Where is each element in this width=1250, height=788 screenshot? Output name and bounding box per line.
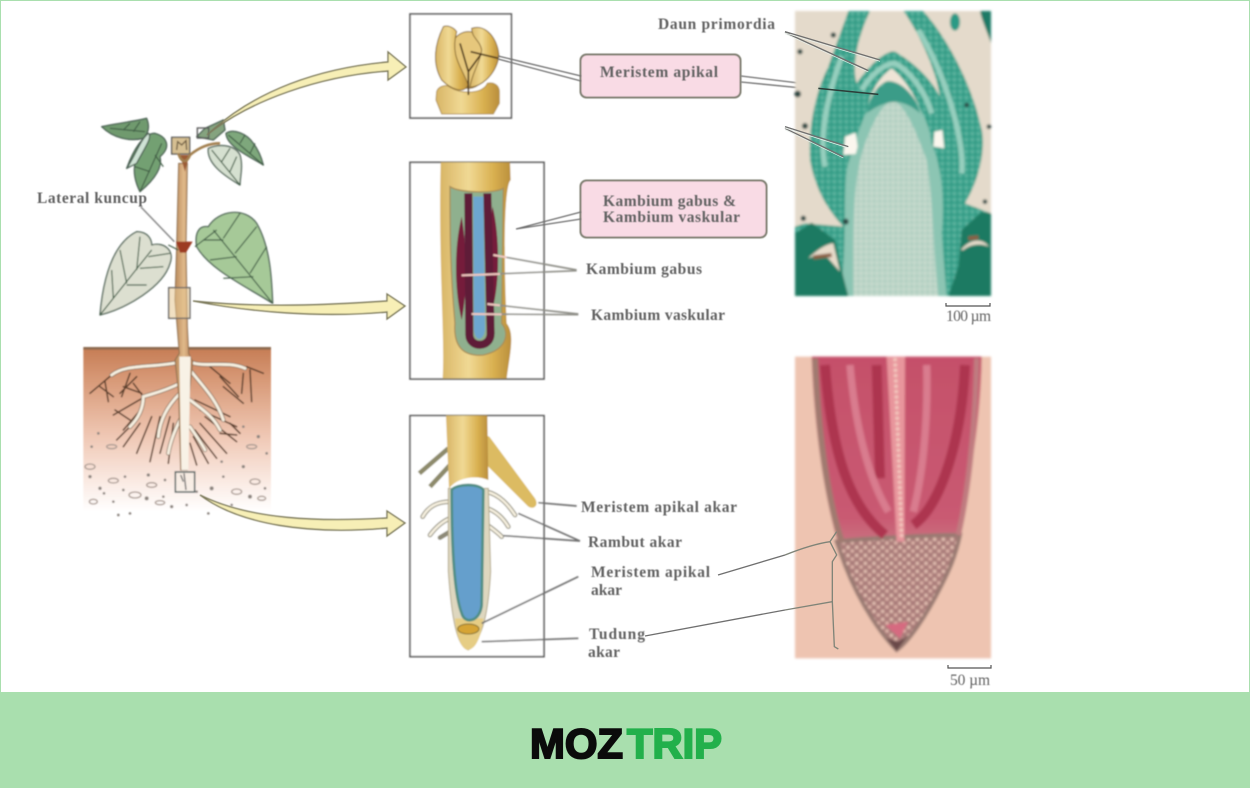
blue core bbox=[473, 197, 485, 339]
panel: apical bud bbox=[410, 14, 511, 118]
pointer lines bbox=[482, 503, 580, 642]
label: Meristem apikal akar two lines: akar bbox=[591, 582, 622, 599]
label: Meristem apikal akar two lines: Meristem apikal bbox=[591, 564, 711, 581]
pointer line to lateral bud bbox=[141, 207, 174, 242]
footer logo: MOZ bbox=[530, 720, 623, 767]
arrow: top bud bbox=[207, 52, 406, 135]
panel: root section bbox=[410, 416, 580, 657]
arrow: root tip bbox=[200, 495, 405, 536]
stem sample box bbox=[169, 288, 190, 318]
callout: Meristem apikal bbox=[580, 54, 740, 98]
pale central stele bbox=[887, 357, 905, 542]
main lateral roots bbox=[112, 362, 245, 453]
outer root shape bbox=[812, 357, 982, 650]
cell zone bbox=[837, 535, 960, 650]
label: Tudung akar bbox=[588, 626, 645, 661]
label: Meristem apikal akar two lines bbox=[591, 564, 711, 599]
upper root hairs bbox=[419, 448, 450, 487]
callout: Kambium gabus and vaskular: Kambium gabus & bbox=[603, 193, 736, 210]
root tip sample box bbox=[175, 472, 195, 492]
soil block bbox=[83, 347, 271, 516]
tip dark bbox=[887, 635, 908, 651]
pale root sheath bbox=[448, 488, 491, 650]
pale left rim bbox=[815, 358, 842, 542]
gap above apex bbox=[868, 68, 920, 108]
pale pointers bbox=[462, 255, 578, 315]
panel: stem cross-section bbox=[410, 162, 578, 379]
label: Tudung akar: akar bbox=[588, 644, 620, 661]
dark specks bbox=[794, 32, 991, 225]
apex dome bbox=[867, 82, 920, 113]
darker streaks bbox=[825, 365, 965, 535]
bud collar bbox=[436, 83, 499, 114]
inner tissue bbox=[840, 83, 947, 296]
bud gaps bbox=[843, 130, 944, 155]
stem body bbox=[440, 162, 511, 378]
label: Tudung akar: Tudung bbox=[589, 626, 645, 643]
lateral root bbox=[485, 435, 537, 508]
callout: Meristem apikal: Meristem apikal bbox=[600, 64, 719, 81]
stem and taproot bbox=[175, 155, 193, 470]
cork cambium lenses bbox=[456, 207, 498, 320]
footer logo bbox=[530, 720, 722, 767]
pointer lines bbox=[785, 32, 880, 157]
label: Daun primordia: Daun primordia bbox=[658, 16, 775, 33]
micrograph: shoot tip, teal bbox=[785, 11, 991, 296]
lower root hairs bbox=[423, 492, 515, 538]
bud dome and leaves bbox=[435, 26, 499, 90]
label: Rambut akar: Rambut akar bbox=[588, 534, 682, 551]
pointer lines to right micrographs from root labels bbox=[645, 555, 785, 636]
pith bbox=[853, 100, 938, 296]
bracket and pointer lines bbox=[785, 532, 838, 649]
leaves bbox=[100, 118, 273, 315]
label: Meristem apikal akar: Meristem apikal akar bbox=[581, 499, 737, 516]
lower corners bbox=[795, 212, 991, 296]
scale bar: 50 µm: 50 µm bbox=[950, 672, 990, 689]
micrograph: root tip, pink bbox=[785, 357, 991, 658]
footer logo: TRIP bbox=[627, 720, 722, 767]
paler leaf band bbox=[823, 30, 962, 173]
callout: Kambium gabus and vaskular bbox=[580, 180, 766, 238]
blue vascular core bbox=[452, 485, 483, 620]
outer specks bbox=[950, 13, 960, 31]
cortex cutaway bbox=[450, 187, 506, 355]
top bud box bbox=[172, 128, 220, 161]
arrow: stem section bbox=[193, 294, 405, 319]
callout: Kambium gabus and vaskular: Kambium vaskular bbox=[603, 209, 740, 226]
callout pointers bbox=[498, 56, 873, 229]
vascular tube bbox=[468, 193, 491, 345]
outer leaves and body bbox=[795, 11, 991, 296]
label: Kambium vaskular: Kambium vaskular bbox=[591, 307, 725, 324]
fine root hairs bbox=[90, 367, 263, 465]
footer band bbox=[0, 692, 1250, 788]
root tan top bbox=[446, 416, 488, 488]
label: Lateral kuncup: Lateral kuncup bbox=[37, 190, 147, 207]
meristem tip bbox=[458, 624, 479, 634]
bud crease lines bbox=[460, 43, 498, 95]
whole plant illustration bbox=[83, 118, 273, 516]
slits in corners bbox=[808, 241, 989, 272]
scale bar: 50 µm bbox=[948, 665, 991, 689]
scale bar: 100 µm: 100 µm bbox=[946, 308, 991, 325]
leaf veins bbox=[100, 122, 273, 315]
label: Kambium gabus: Kambium gabus bbox=[586, 261, 702, 278]
root cap bbox=[455, 618, 483, 650]
